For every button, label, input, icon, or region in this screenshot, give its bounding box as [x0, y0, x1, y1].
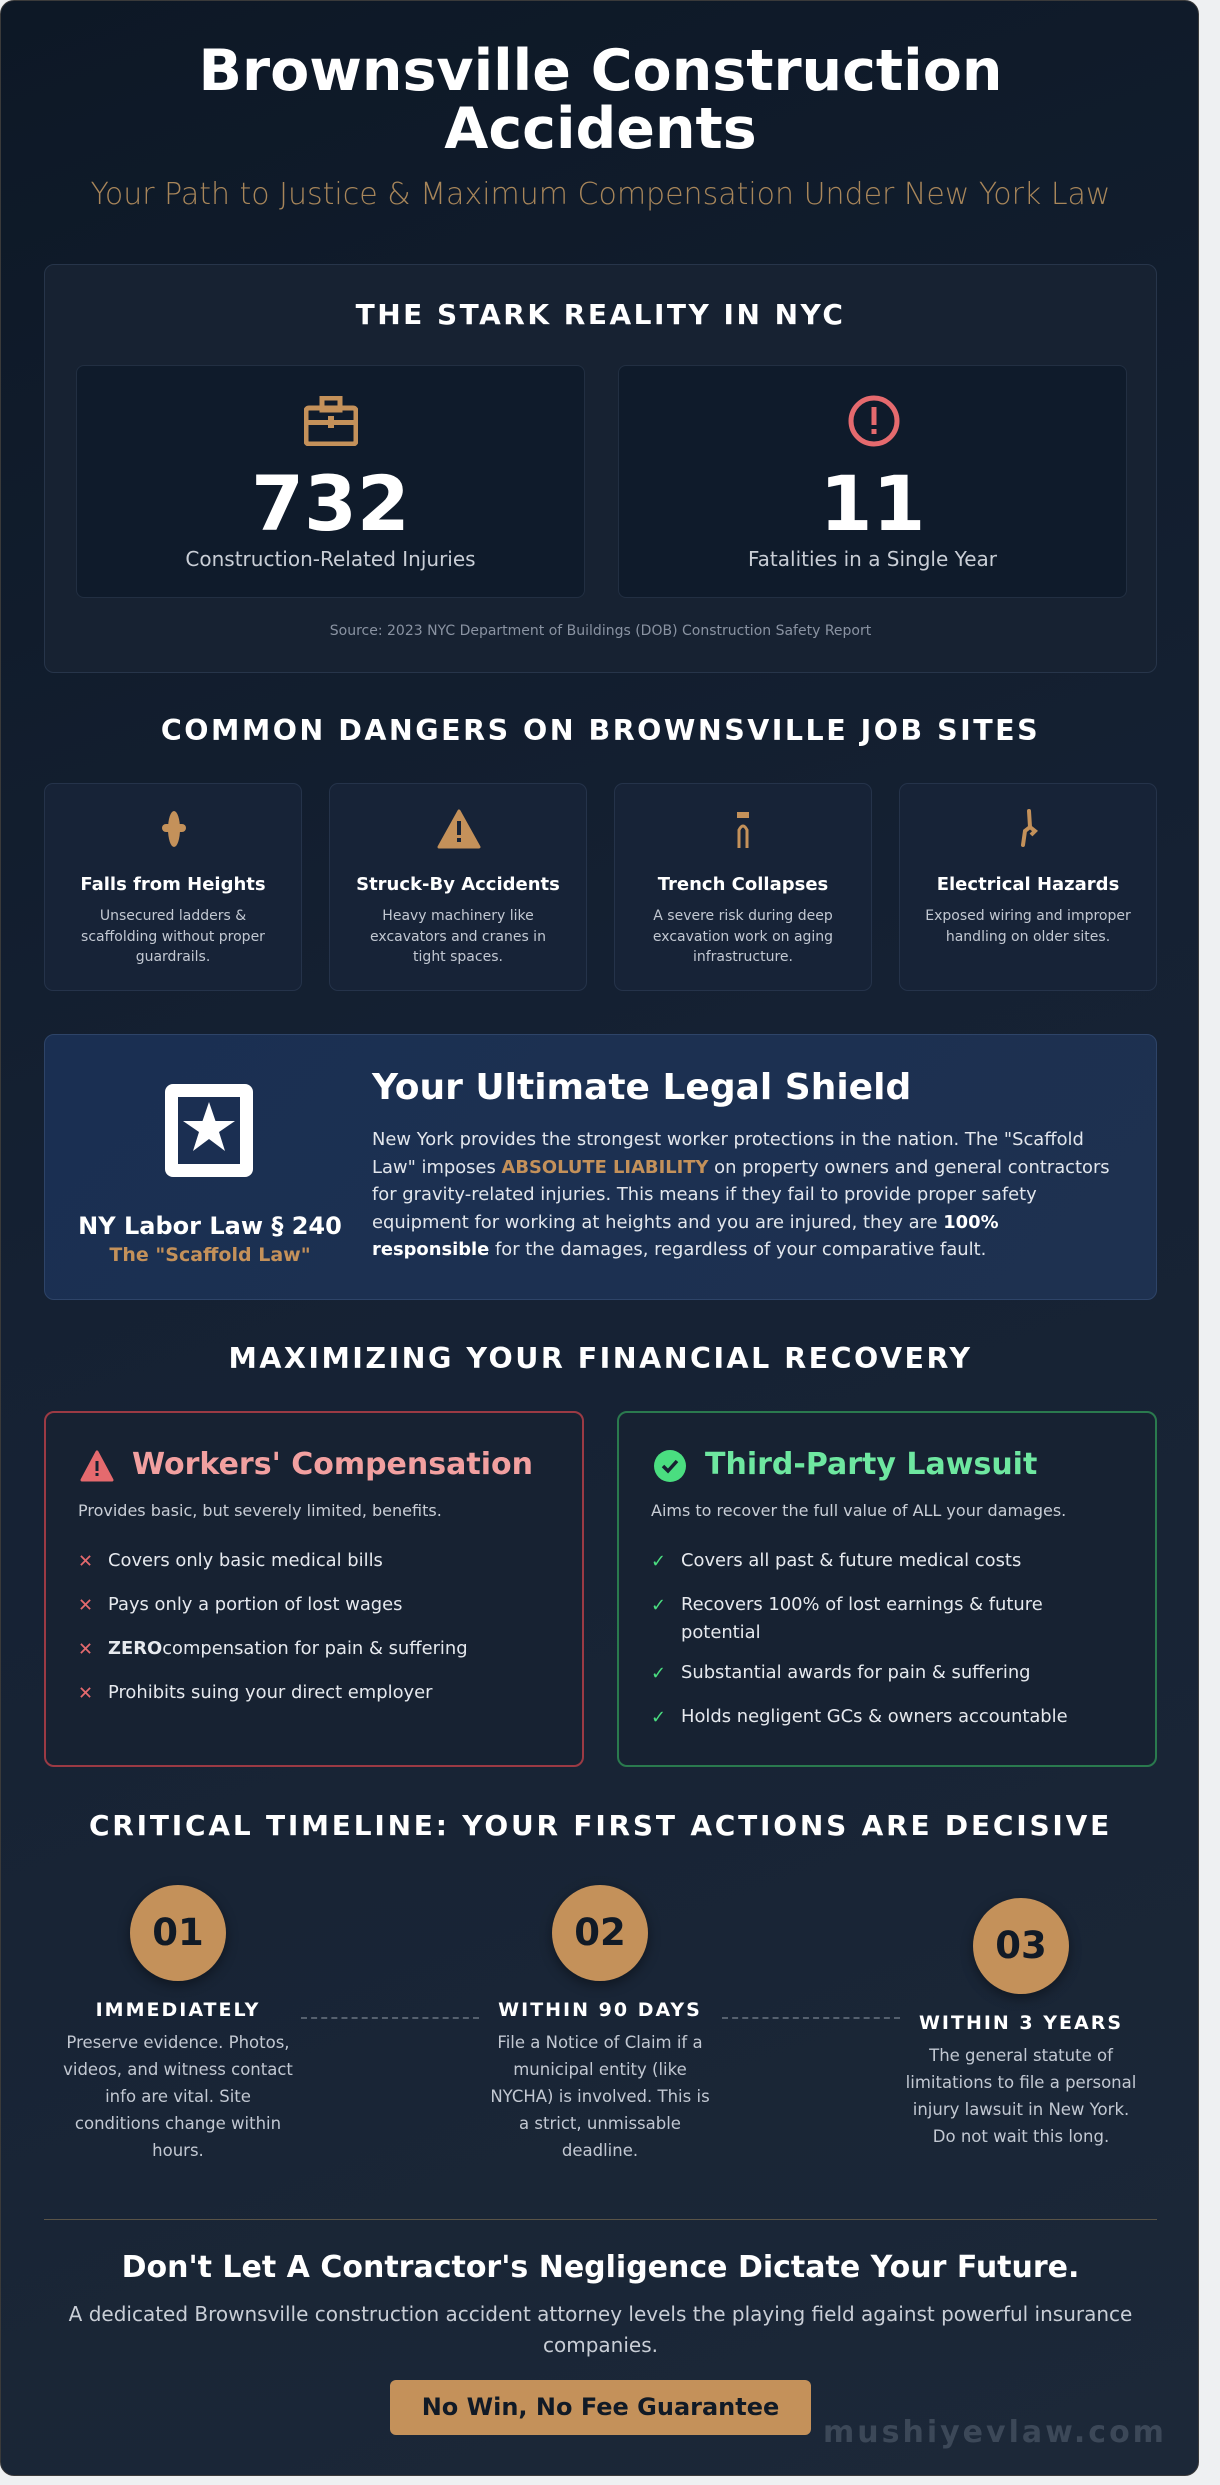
list: Holds negligent GCs & owners accountable [681, 1706, 1068, 1727]
heading: common dangers: COMMON DANGERS ON BROWNSVILLE JOB SITES [161, 714, 1040, 747]
danger card: trench: A severe risk during deep excavation work on aging infrastructure. [653, 908, 833, 965]
list: Covers all past & future medical costs [681, 1550, 1021, 1571]
danger card: falls [44, 783, 302, 991]
icon: falling person [162, 811, 186, 847]
icon: star badge [165, 1084, 253, 1177]
timeline connector 1 [301, 2017, 479, 2019]
heading: stark reality: THE STARK REALITY IN NYC [356, 298, 845, 331]
subtitle: Your Path to Justice & Maximum Compensation Under New York Law [90, 177, 1110, 212]
label: Fatalities in a Single Year [748, 547, 997, 571]
list: ✓ [651, 1707, 666, 1728]
icon: shovel [737, 812, 749, 848]
list [78, 1550, 468, 1704]
danger card: falls: Unsecured ladders & scaffolding without proper guardrails. [81, 908, 265, 965]
icon: electrical [1021, 809, 1038, 847]
list: ✕ [78, 1639, 93, 1660]
title: Brownsville Construction [199, 38, 1002, 104]
heading: financial recovery: MAXIMIZING YOUR FINANCIAL RECOVERY [228, 1342, 973, 1375]
list: Recovers 100% of lost earnings & future potential [681, 1594, 1043, 1643]
stat card: injuries [76, 365, 585, 598]
danger card: struck-by [329, 783, 587, 991]
list: ✓ [651, 1595, 666, 1616]
timeline step 2: WITHIN 90 DAYS [498, 1999, 702, 2021]
danger card: electrical: Exposed wiring and improper handling on older sites. [925, 908, 1131, 944]
timeline connector 2 [722, 2017, 900, 2019]
watermark: mushiyevlaw.com [823, 2415, 1167, 2450]
list: Prohibits suing your direct employer [108, 1682, 432, 1703]
CTA button [390, 2380, 811, 2435]
list: Pays only a portion of lost wages [108, 1594, 402, 1615]
list: ✓ [651, 1663, 666, 1684]
list: ✕ [78, 1551, 93, 1572]
shield body: New York provides the strongest worker protections in the nation. The "Scaffold Law" imposes ABSOLUTE LIABILITY on property owners and general contractors for gravity-related injuries. This means if they fail to provide proper safety equipment for working at heights and you are injured, they are 100% responsible for the damages, regardless of your comparative fault. [372, 1129, 1110, 1260]
icon: warning triangle [438, 809, 480, 848]
timeline step 3: WITHIN 3 YEARS [919, 2012, 1123, 2034]
icon: check circle [654, 1450, 686, 1482]
danger card: falls: Falls from Heights [80, 874, 266, 895]
panel: workers comp [44, 1411, 584, 1767]
label: Construction-Related Injuries [185, 547, 476, 571]
icon: briefcase [304, 396, 358, 446]
shield heading: Your Ultimate Legal Shield [372, 1067, 911, 1108]
timeline step 1: Preserve evidence. Photos, videos, and witness contact info are vital. Site conditions change within hours. [63, 2033, 293, 2160]
icon: exclamation circle [848, 396, 900, 446]
danger card: electrical: Electrical Hazards [937, 874, 1119, 895]
subtitle: Aims to recover the full value of ALL your damages. [651, 1501, 1066, 1520]
list: Substantial awards for pain & suffering [681, 1662, 1031, 1683]
panel: stark reality [44, 264, 1157, 673]
panel: third party [617, 1411, 1157, 1767]
subtitle: Provides basic, but severely limited, benefits. [78, 1501, 442, 1520]
number 732: 732 [251, 459, 410, 548]
title: Third-Party Lawsuit [705, 1447, 1037, 1482]
law nickname: The "Scaffold Law" [109, 1244, 311, 1266]
list: ✓ [651, 1551, 666, 1572]
panel: legal shield [44, 1034, 1157, 1300]
source: Source: 2023 NYC Department of Buildings (DOB) Construction Safety Report [330, 623, 871, 639]
number 11: 11 [820, 459, 925, 548]
CTA button: No Win, No Fee Guarantee [422, 2393, 779, 2421]
list: ✕ [78, 1683, 93, 1704]
list: ZEROcompensation for pain & suffering [108, 1638, 468, 1659]
danger card: electrical [899, 783, 1157, 991]
stat card: fatalities [618, 365, 1127, 598]
timeline step 1: IMMEDIATELY [96, 1999, 260, 2021]
danger card: struck-by: Struck-By Accidents [356, 874, 560, 895]
list: Covers only basic medical bills [108, 1550, 383, 1571]
heading: timeline: CRITICAL TIMELINE: YOUR FIRST ACTIONS ARE DECISIVE [89, 1809, 1112, 1842]
law name: NY Labor Law § 240 [78, 1212, 342, 1240]
timeline step 1 [63, 1885, 293, 2160]
icon: warning [80, 1450, 114, 1482]
timeline step 2 [490, 1885, 710, 2160]
title: Workers' Compensation [132, 1447, 533, 1482]
timeline step 3 [906, 1898, 1136, 2146]
timeline step 3: 03 [995, 1924, 1047, 1967]
danger card: trench: Trench Collapses [658, 874, 828, 895]
timeline step 2: 02 [574, 1911, 626, 1954]
timeline step 1: 01 [152, 1911, 204, 1954]
timeline step 2: File a Notice of Claim if a municipal entity (like NYCHA) is involved. This is a strict, unmissable deadline. [490, 2033, 710, 2160]
danger card: struck-by: Heavy machinery like excavators and cranes in tight spaces. [370, 908, 546, 965]
title [199, 38, 1002, 162]
timeline step 3: The general statute of limitations to file a personal injury lawsuit in New York. Do not wait this long. [906, 2046, 1136, 2146]
danger card: trench [614, 783, 872, 991]
title: Accidents [444, 96, 757, 162]
CTA text: A dedicated Brownsville construction accident attorney levels the playing field against powerful insurance companies. [69, 2302, 1132, 2357]
CTA heading: Don't Let A Contractor's Negligence Dictate Your Future. [122, 2250, 1079, 2285]
list: ✕ [78, 1595, 93, 1616]
list [651, 1550, 1068, 1728]
